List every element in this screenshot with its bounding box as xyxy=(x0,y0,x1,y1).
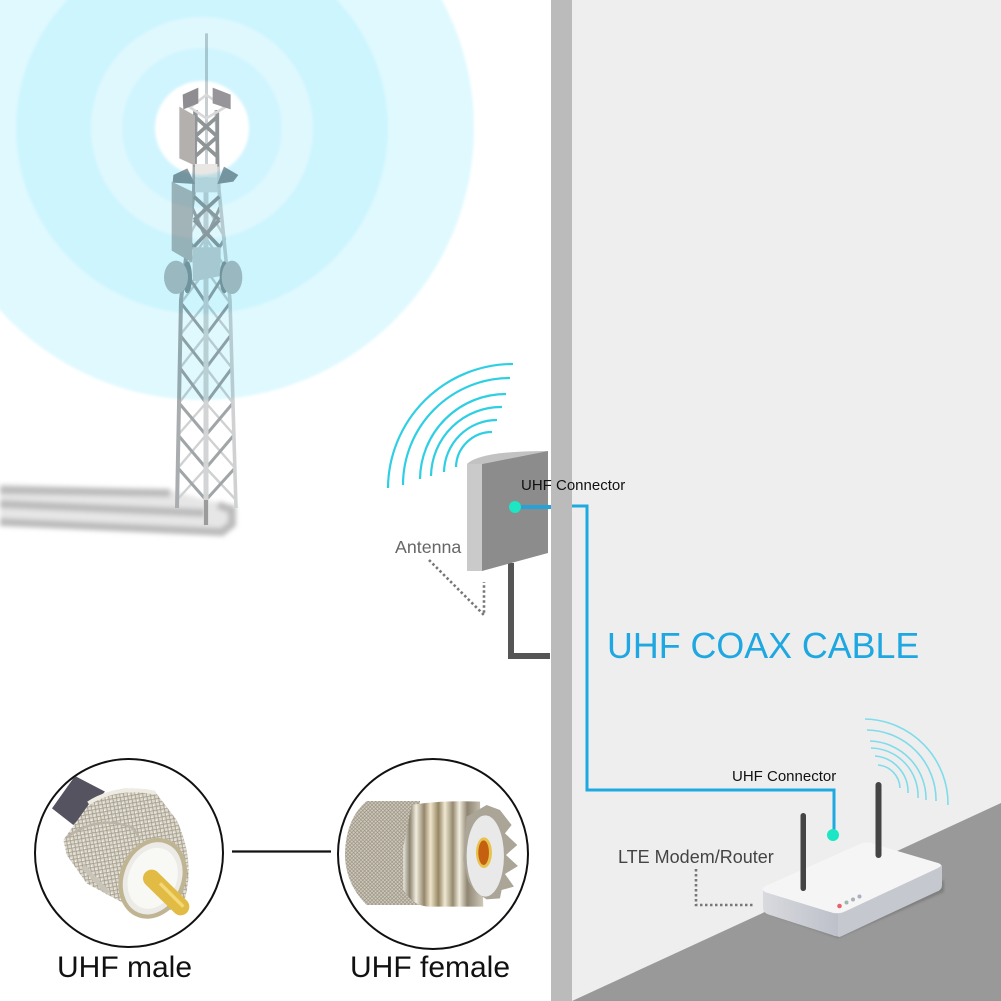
front ring xyxy=(118,838,187,919)
router xyxy=(763,782,944,938)
mid lattice xyxy=(194,197,219,247)
router shadow xyxy=(763,880,944,938)
antenna label leader xyxy=(429,560,484,615)
router signal waves xyxy=(865,719,948,805)
white platform box xyxy=(195,164,217,177)
knurled body xyxy=(63,788,189,912)
link between connectors xyxy=(232,850,331,853)
signal rings xyxy=(0,0,474,400)
cable title: UHF COAX CABLE xyxy=(607,626,919,666)
top rear panels xyxy=(183,88,198,109)
router connector dot xyxy=(827,829,839,841)
toothed collar xyxy=(463,805,518,899)
UHF male connector xyxy=(35,759,223,947)
upper UHF connector label: UHF Connector xyxy=(521,477,625,494)
antenna panel xyxy=(467,451,548,571)
tower ground shadow xyxy=(0,484,236,533)
right dish xyxy=(220,261,229,293)
antenna signal waves xyxy=(388,364,513,488)
router right side xyxy=(838,865,942,937)
blue coax through antenna xyxy=(515,505,551,509)
male caption: UHF male xyxy=(57,951,192,984)
large side panel xyxy=(172,182,192,263)
router top xyxy=(763,842,941,913)
light column block xyxy=(195,177,217,192)
tower lattice dark bracing xyxy=(178,205,235,500)
tower legs xyxy=(177,110,236,525)
silver bands xyxy=(88,790,155,803)
female circle outline xyxy=(338,759,528,949)
center hole xyxy=(476,837,492,868)
top platform frame xyxy=(190,95,225,118)
gold pin xyxy=(152,878,181,907)
tower lattice light bracing xyxy=(177,205,236,500)
blue coax cable run xyxy=(572,506,834,830)
insulator xyxy=(128,848,178,908)
equipment box xyxy=(193,247,221,282)
lower UHF connector label: UHF Connector xyxy=(732,768,836,785)
coax jacket xyxy=(52,776,105,825)
antenna top xyxy=(467,451,548,464)
router label leader xyxy=(696,869,755,905)
UHF female connector xyxy=(338,759,528,949)
mast xyxy=(205,33,208,167)
mid platform xyxy=(173,168,195,184)
tower top equipment xyxy=(164,33,242,294)
front antenna xyxy=(800,813,806,891)
antenna front xyxy=(482,451,548,571)
white face xyxy=(467,815,504,897)
antenna label: Antenna xyxy=(395,537,461,557)
status LEDs xyxy=(837,894,862,908)
cell tower xyxy=(164,33,242,525)
router label: LTE Modem/Router xyxy=(618,847,774,867)
router left side xyxy=(763,890,842,936)
rear antenna xyxy=(876,782,882,858)
threaded section xyxy=(403,801,483,907)
grey antenna cable xyxy=(511,563,550,656)
knurled barrel xyxy=(345,801,420,905)
upper lattice xyxy=(195,110,217,167)
pin highlight xyxy=(160,883,183,907)
interior wall surface xyxy=(572,0,1001,1001)
antenna connector dot xyxy=(509,501,521,513)
antenna side xyxy=(467,464,482,571)
floor xyxy=(572,803,1001,1001)
wall cross-section band xyxy=(551,0,572,1001)
tall upper panel xyxy=(179,107,195,166)
female caption: UHF female xyxy=(350,951,510,984)
male circle outline xyxy=(35,759,223,947)
left dish xyxy=(183,261,192,293)
